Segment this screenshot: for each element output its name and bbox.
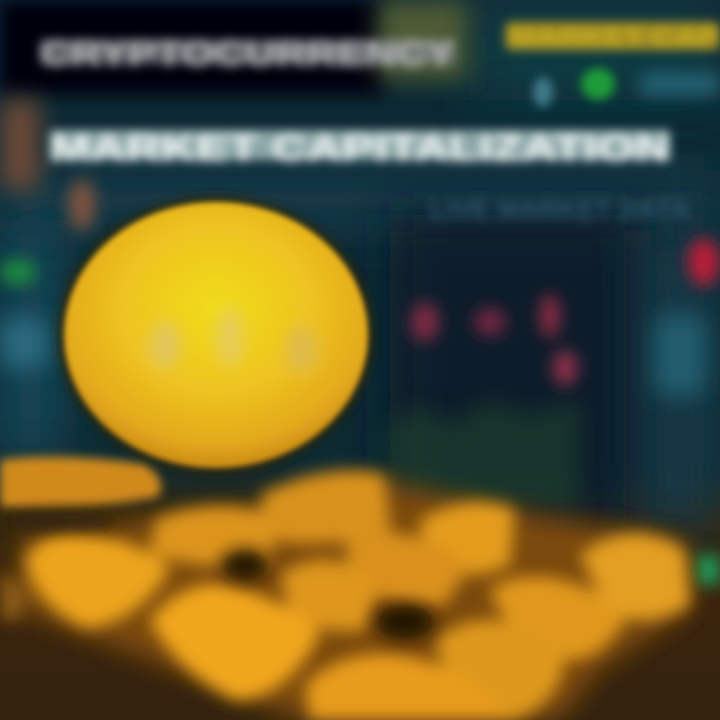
coin emblem bbox=[149, 308, 318, 374]
rear gold bar left bbox=[0, 457, 161, 508]
top right status row bbox=[533, 68, 720, 107]
large gold coin bbox=[59, 197, 373, 473]
title line 2: MARKET CAPITALIZATION bbox=[50, 128, 670, 170]
top right banner: MARKET CAP bbox=[510, 22, 718, 52]
gold bars bbox=[0, 470, 690, 720]
gaps between bars bbox=[2, 512, 435, 640]
subtitle: LIVE MARKET DATA bbox=[430, 194, 690, 224]
right side indicators bbox=[655, 238, 720, 585]
title line 1: CRYPTOCURRENCY bbox=[40, 33, 455, 74]
gold pile bbox=[0, 470, 690, 720]
candlestick chart background bbox=[385, 294, 580, 510]
left side indicators bbox=[0, 179, 96, 368]
warm under-glow bbox=[20, 480, 690, 720]
